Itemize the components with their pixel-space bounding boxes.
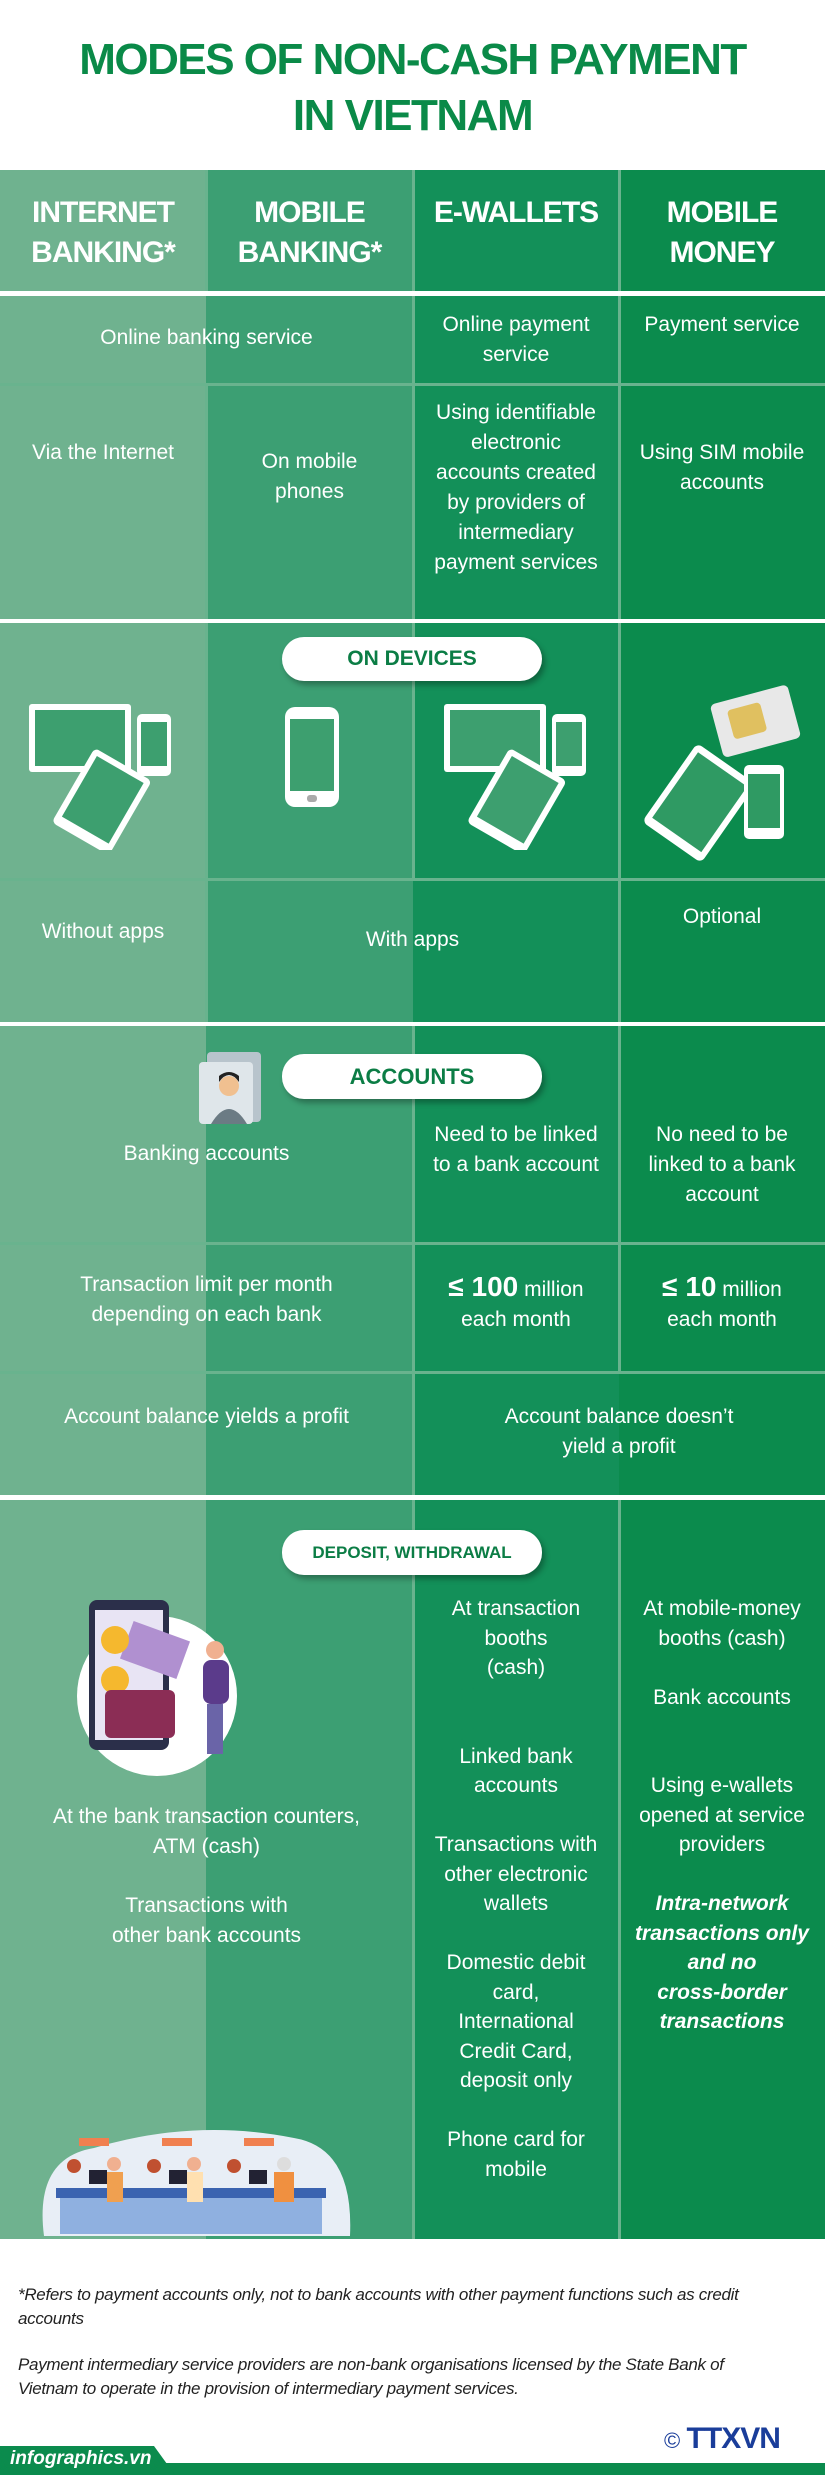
- text: identifiable accounts: Using identifiable: [436, 401, 596, 424]
- illustration: wallet: [77, 1600, 237, 1776]
- text: e-wallet deposit methods: [435, 1597, 597, 2180]
- text: no need to be linked: linked to a bank: [648, 1153, 796, 1176]
- text: no need to be linked: [648, 1123, 796, 1206]
- text: SIM accounts: Using SIM mobile: [640, 441, 804, 464]
- text: transactions with bank accounts: other bank accounts: [112, 1924, 301, 1947]
- text: 10 million: [662, 1271, 782, 1331]
- text: balance doesn't yield: Account balance doesn’t: [505, 1405, 733, 1428]
- text: online payment service: [442, 313, 590, 366]
- text: e-wallet deposit methods: Phone card for: [447, 2128, 585, 2151]
- text: online payment service: service: [483, 343, 549, 366]
- text: e-wallet deposit methods: card,: [493, 1980, 539, 2004]
- text: transaction limit: Transaction limit per month: [80, 1273, 333, 1296]
- text: no need to be linked: account: [685, 1183, 759, 1206]
- text: mobile money deposit methods: and no: [688, 1951, 756, 1974]
- text: need to be linked: to a bank account: [433, 1153, 599, 1176]
- footer bar: infographics.vn: infographics.vn: [10, 2448, 151, 2469]
- text: e-wallet deposit methods: mobile: [485, 2158, 547, 2180]
- text: mobile money deposit methods: [635, 1597, 810, 2033]
- header: mobile banking: [238, 196, 382, 269]
- text: identifiable accounts: intermediary: [458, 521, 574, 544]
- text: identifiable accounts: [434, 401, 598, 574]
- text: SIM accounts: accounts: [680, 471, 764, 494]
- text: 10 million: ≤ 10 million: [662, 1271, 782, 1302]
- text: e-wallet deposit methods: Transactions with: [435, 1833, 597, 1856]
- pill: deposit withdrawal: DEPOSIT, WITHDRAWAL: [312, 1543, 512, 1562]
- text: identifiable accounts: accounts created: [436, 461, 596, 484]
- text: bank counters: [53, 1805, 360, 1858]
- icon: devices e-wallets: [444, 704, 586, 850]
- header: internet banking: [31, 196, 176, 269]
- header: e-wallets: E-WALLETS: [434, 196, 598, 229]
- text: banking accounts: Banking accounts: [124, 1142, 289, 1165]
- text: on mobile phones: On mobile: [262, 450, 357, 473]
- text: mobile money deposit methods: transactions: [660, 2010, 784, 2033]
- logo: TTXVN: © TTXVN: [664, 2422, 780, 2455]
- text: e-wallet deposit methods: other electronic: [444, 1862, 588, 1886]
- title: IN VIETNAM: [293, 91, 532, 140]
- text: online payment service: Online payment: [442, 313, 590, 336]
- text: 100 million: [448, 1271, 584, 1331]
- text: payment service: Payment service: [644, 313, 800, 336]
- text: mobile money deposit methods: booths (cash): [658, 1626, 786, 1650]
- pill: accounts: [282, 1054, 542, 1099]
- text: mobile money deposit methods: Intra-network: [655, 1892, 788, 1915]
- pill: on devices: ON DEVICES: [347, 647, 477, 670]
- text: e-wallet deposit methods: International: [458, 2010, 574, 2033]
- text: 100 million: ≤ 100 million: [448, 1271, 584, 1302]
- header: internet banking: INTERNET: [32, 196, 174, 229]
- text: identifiable accounts: electronic: [471, 431, 561, 454]
- text: mobile money deposit methods: providers: [679, 1833, 765, 1856]
- text: mobile money deposit methods: Using e-wallets: [651, 1774, 793, 1797]
- text: e-wallet deposit methods: accounts: [474, 1774, 558, 1797]
- text: need to be linked: Need to be linked: [434, 1123, 598, 1146]
- header: internet banking: BANKING*: [31, 236, 175, 269]
- title: [79, 35, 747, 140]
- text: on mobile phones: phones: [275, 480, 344, 503]
- pill: deposit withdrawal: [282, 1530, 542, 1575]
- header: mobile banking: BANKING*: [238, 236, 381, 269]
- text: e-wallet deposit methods: wallets: [484, 1892, 548, 1915]
- icon: phone mobile banking: [285, 707, 339, 807]
- text: transaction limit: depending on each bank: [91, 1303, 322, 1326]
- text: transactions with bank accounts: Transactions with: [125, 1894, 288, 1917]
- text: e-wallet deposit methods: booths: [484, 1626, 548, 1650]
- pill: on devices: [282, 637, 542, 681]
- text: mobile money deposit methods: cross-border: [657, 1980, 787, 2004]
- text: mobile money deposit methods: At mobile-money: [643, 1597, 801, 1620]
- text: no need to be linked: No need to be: [656, 1123, 788, 1146]
- text: e-wallet deposit methods: Credit Card,: [459, 2040, 573, 2062]
- text: e-wallet deposit methods: (cash): [487, 1656, 545, 1679]
- header: mobile money: MOBILE: [667, 196, 777, 229]
- text: mobile money deposit methods: transactions only: [635, 1922, 809, 1944]
- icon: SIM and devices mobile money: [644, 685, 800, 861]
- text: mobile money deposit methods: Bank accounts: [653, 1686, 791, 1708]
- text: mobile money deposit methods: opened at service: [639, 1804, 805, 1826]
- text: identifiable accounts: payment services: [434, 551, 598, 574]
- text: balance doesn't yield: [504, 1405, 734, 1458]
- text: e-wallet deposit methods: deposit only: [460, 2069, 572, 2092]
- text: identifiable accounts: by providers of: [447, 491, 585, 514]
- text: balance doesn't yield: yield a profit: [562, 1435, 676, 1458]
- text: bank counters: At the bank transaction counters,: [53, 1805, 360, 1828]
- header: mobile banking: MOBILE: [254, 196, 365, 229]
- text: via the internet: Via the Internet: [32, 441, 174, 464]
- footer bar: infographics.vn: [0, 2446, 825, 2475]
- text: transaction limit: [80, 1273, 333, 1326]
- text: balance yields profit: Account balance yields a profit: [64, 1405, 349, 1428]
- illustration: bank counter: [42, 2130, 350, 2236]
- title: MODES OF NON-CASH PAYMENT: [79, 35, 746, 84]
- text: transactions with bank accounts: [112, 1894, 301, 1947]
- text: bank counters: ATM (cash): [153, 1835, 260, 1858]
- text: on mobile phones: [262, 450, 357, 503]
- text: online banking service: Online banking service: [100, 326, 313, 349]
- text: with apps: With apps: [366, 928, 459, 951]
- text: SIM accounts: [640, 441, 804, 494]
- text: without apps: Without apps: [42, 920, 164, 943]
- text: 10 million: each month: [667, 1308, 777, 1331]
- icon: devices internet banking: [29, 704, 171, 850]
- pill: accounts: ACCOUNTS: [350, 1064, 474, 1089]
- icon: account folder: [199, 1052, 261, 1124]
- text: need to be linked: [433, 1123, 599, 1176]
- header: mobile money: [667, 196, 778, 269]
- text: e-wallet deposit methods: Domestic debit: [447, 1951, 585, 1974]
- footnotes: *Refers to payment accounts only, not to bank accounts with other payment functions such as credit accounts Payment intermediary service providers are non-bank organisations licensed by the State Bank of Vietnam to operate in the provision of intermediary payment services.: [18, 2285, 739, 2398]
- text: optional: Optional: [683, 905, 761, 928]
- text: e-wallet deposit methods: Linked bank: [459, 1744, 573, 1768]
- text: 100 million: each month: [461, 1308, 571, 1331]
- text: e-wallet deposit methods: At transaction: [452, 1597, 580, 1620]
- header: mobile money: MONEY: [669, 236, 774, 269]
